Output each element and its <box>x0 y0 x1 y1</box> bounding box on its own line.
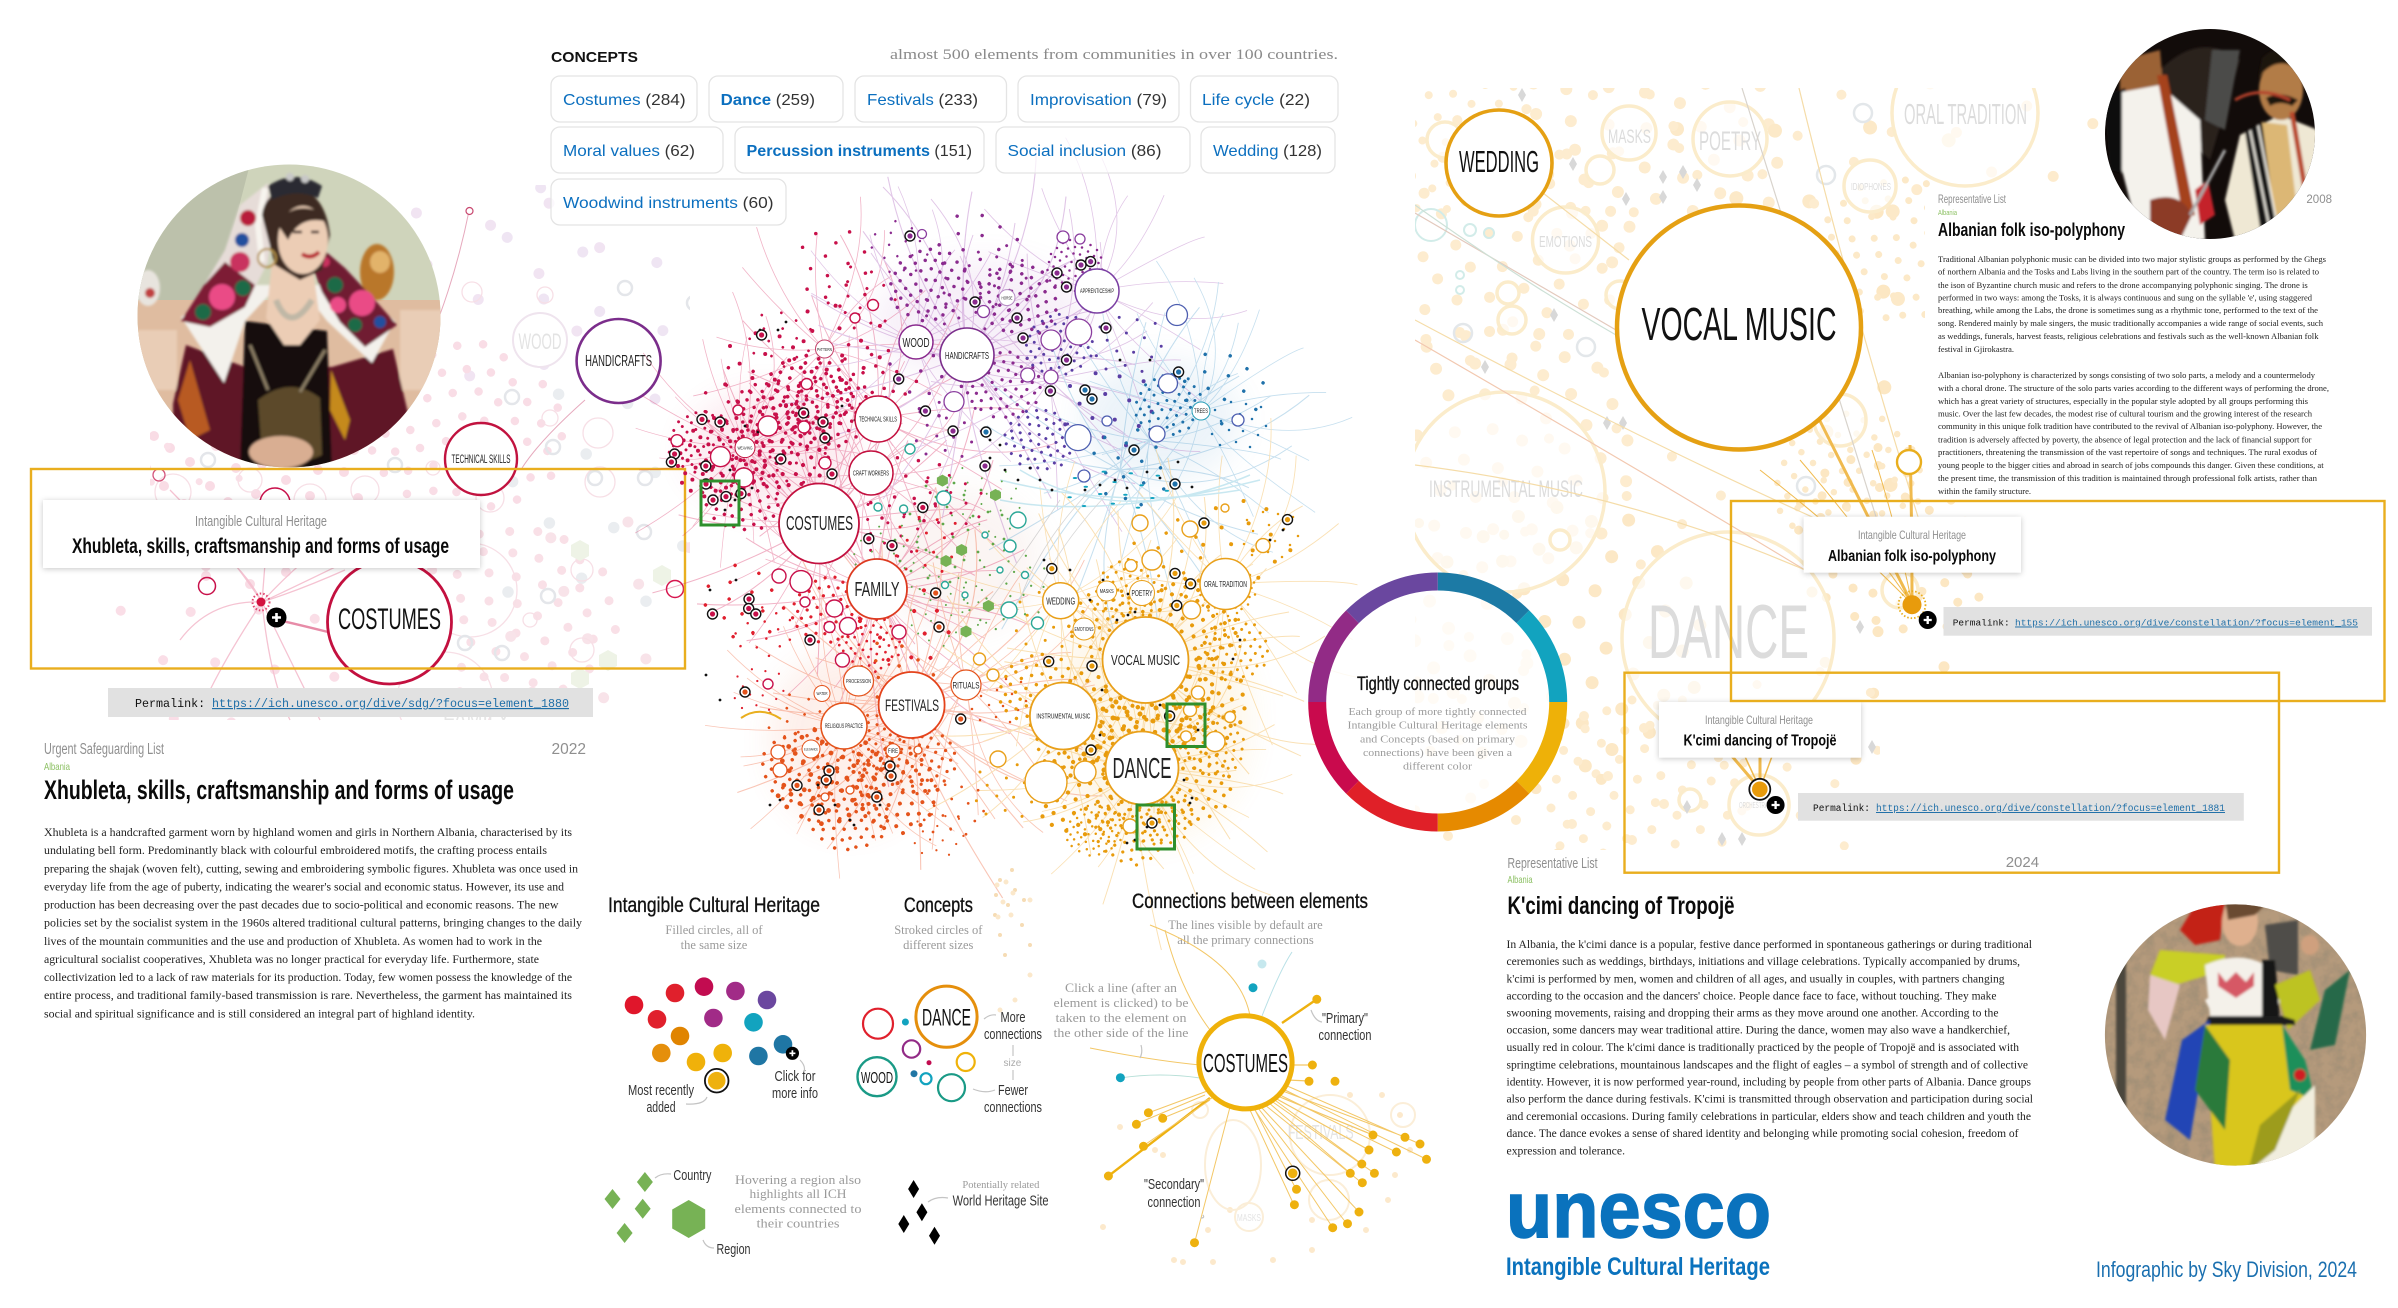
concept: elegance <box>802 740 820 758</box>
year: K'cimi: 2024 <box>2006 854 2039 871</box>
description paragraph: agricultural socialist cooperatives, Xhubleta was no longer practical for everyday life. Furthermore, state <box>44 954 539 966</box>
country: Albania <box>44 761 70 773</box>
concept: weaving: WEAVING <box>738 446 753 451</box>
icon: plus button <box>266 608 286 628</box>
description paragraph: entire process, and traditional family-based transmission is rare. Nevertheless, the garment has maintained its <box>44 990 573 1002</box>
label: fewer connections: Fewer <box>998 1082 1028 1099</box>
node: K'cimi <box>1749 779 1770 800</box>
donut description: and Concepts (based on primary <box>1360 733 1516 745</box>
heading: concepts: CONCEPTS <box>551 49 638 66</box>
concept: emotions: EMOTIONS <box>1074 627 1094 633</box>
text block: K'cimi dancing of Tropojë <box>1506 855 2033 1158</box>
description paragraph: expression and tolerance. <box>1506 1146 1625 1158</box>
concept: craft workers: CRAFT WORKERS <box>853 470 889 478</box>
description paragraph: and ceremonial occasions. During family celebrations in particular, elders show and teach children and youth the <box>1506 1111 2031 1123</box>
description paragraph: collectivization led to a lack of raw materials for its production. Today, few women possess the knowledge of the <box>44 972 572 984</box>
chip: moral values: Moral values (62) <box>563 143 695 160</box>
concept: festivals <box>879 672 945 738</box>
text block: Albanian folk iso-polyphony <box>1938 194 2332 496</box>
card: iso-polyphony tooltip <box>1804 517 2021 573</box>
description paragraphs: music. Over the last few decades, the modest rise of cultural tourism and the growing interest of the research <box>1938 408 2313 418</box>
recently added nodes <box>666 231 1292 828</box>
panel: zoomed costumes constellation background <box>116 185 690 720</box>
description paragraphs: festival in Gjirokastra. <box>1938 344 2014 354</box>
element title: Albanian folk iso-polyphony <box>1938 220 2125 240</box>
chip: woodwind instruments: Woodwind instruments (60) <box>563 195 774 212</box>
concept: wedding <box>1043 583 1079 619</box>
concept: wood circle <box>858 1057 896 1096</box>
focus links: K'cimi <box>1731 758 1772 782</box>
concept: dance: DANCE <box>1112 753 1172 785</box>
concept: instrumental music <box>1030 682 1097 750</box>
concept: instrumental music: INSTRUMENTAL MUSIC <box>1036 714 1090 720</box>
concept: technical skills: TECHNICAL SKILLS <box>859 416 897 424</box>
donut description <box>1348 706 1528 773</box>
concept: pattern: PATTERN <box>817 347 832 352</box>
description paragraphs: community in this unique folk tradition have contributed to the revival of Albanian iso-polyphony. However, the <box>1938 421 2322 431</box>
faded concept circles <box>1405 40 2038 835</box>
dots: green cluster <box>842 451 1063 652</box>
description paragraph: springtime celebrations, mountainous landscapes and the flight of eagles – a symbol of strength and of collective <box>1506 1060 2028 1072</box>
example small nodes <box>902 1018 932 1077</box>
links of the focused element <box>153 208 684 720</box>
icon: plus button <box>1919 611 1937 629</box>
description paragraphs: the ison of Byzantine church music and refers to the drone accompanying polyphonic singing. The drone is <box>1938 280 2308 290</box>
tail of dots under network <box>995 870 1030 955</box>
chip: life cycle: Life cycle (22) <box>1202 92 1310 109</box>
year: 2022 <box>552 741 586 758</box>
label: more connections <box>984 1009 1042 1043</box>
donut: tightly connected groups <box>1317 582 1558 822</box>
connected nodes <box>1108 999 1426 1243</box>
chip: costumes: Costumes (284) <box>563 92 686 109</box>
permalink bar: Xhubleta: https://ich.unesco.org/dive/sdg/?focus=element_1880 <box>212 697 569 711</box>
description: Stroked circles of <box>894 923 983 937</box>
note: hovering a region: Hovering a region also <box>735 1173 861 1187</box>
description paragraphs: the present time, the transmission of this tradition is maintained through professional folk artists, rather than <box>1938 473 2318 483</box>
concept: technical skills <box>445 423 517 495</box>
description paragraph: k'cimi is performed by men, women and children of all ages, and usually in couples, with partners changing <box>1506 974 2005 986</box>
description paragraph: preparing the shajak (woven felt), cutting, sewing and embroidering symbolic figures. Xhubleta was once used in <box>44 864 578 876</box>
label: most recently added: Most recently <box>628 1082 694 1099</box>
concept: wedding large <box>1446 110 1552 216</box>
region hexagon <box>672 1200 705 1238</box>
faded background: MASKS <box>1237 1213 1261 1224</box>
permalink bar: Xhubleta: Permalink: <box>135 697 205 711</box>
faded concept labels: INSTRUMENTAL MUSIC <box>1429 476 1583 503</box>
click for more info icon <box>786 1047 799 1060</box>
concept: vocal music: VOCAL MUSIC <box>1111 652 1180 669</box>
example concept rings <box>863 1009 975 1101</box>
description paragraphs: which has a great variety of structures, especially in the popular style adopted by all groups performing this <box>1938 396 2309 406</box>
concept: water <box>814 686 830 702</box>
description paragraphs: with a choral drone. The structure of the solo parts varies according to the different ways of performing the drone, <box>1938 383 2329 393</box>
description paragraphs: song. Rendered mainly by male singers, the music traditionally accompanies a wide range of social events, such <box>1938 318 2324 328</box>
faded concept labels: DANCE <box>1648 590 1809 675</box>
chart: central constellation network <box>580 88 1451 998</box>
permalink bar: K'cimi: Permalink: <box>1813 803 1870 814</box>
concept: technical skills: TECHNICAL SKILLS <box>452 454 511 466</box>
concept: masks <box>1097 581 1117 601</box>
dots: orange-red cluster <box>750 632 1026 864</box>
label: world heritage site: World Heritage Site <box>953 1192 1049 1210</box>
permalink bar: iso-polyphony <box>1944 607 2372 636</box>
description paragraph: occasion, some dancers may wear traditional attire. During the dance, women may also wave a handkerchief, <box>1506 1024 2010 1036</box>
text: intro fragment: almost 500 elements from communities in over 100 countries. <box>890 47 1338 63</box>
label: region: Region <box>716 1242 750 1258</box>
element title: Xhubleta, skills, craftsmanship and forms of usage <box>44 775 514 805</box>
concept: dance circle <box>916 986 977 1047</box>
concept: apprenticeship <box>1075 269 1119 313</box>
dots: crimson cluster <box>663 226 989 573</box>
black diamonds <box>898 1180 940 1245</box>
label: click for more info <box>772 1068 818 1102</box>
faded concept labels <box>1429 99 2027 810</box>
heading: Connections between elements <box>1132 890 1368 913</box>
concept rings: blue-violet <box>1065 304 1244 482</box>
concept: costumes: COSTUMES <box>786 513 853 535</box>
concept: weaving <box>735 438 755 458</box>
concept: costumes large <box>328 560 452 684</box>
logo wordmark: unesco <box>1506 1165 1771 1254</box>
card: K'cimi tooltip: K'cimi dancing of Tropojë <box>1684 732 1837 750</box>
concept: horse: HORSE <box>1002 296 1012 300</box>
heading: Concepts <box>904 894 973 917</box>
element title: K'cimi dancing of Tropojë <box>1508 892 1735 920</box>
concept: technical skills <box>855 396 901 442</box>
small concept ring <box>1897 450 1921 474</box>
description paragraphs: tradition is adversely affected by poverty, the absence of legal protection and the lack of financial support for <box>1938 434 2312 444</box>
filled circles <box>625 977 792 1071</box>
legend: intangible cultural heritage: the same size <box>681 938 748 952</box>
legend: intangible cultural heritage <box>608 894 820 1116</box>
label: most recently added <box>628 1082 694 1116</box>
permalink bar: iso-polyphony: https://ich.unesco.org/dive/constellation/?focus=element_155 <box>2015 618 2358 628</box>
label: click for more info: Click for <box>774 1068 816 1085</box>
description paragraph: everyday life from the age of puberty, indicating the wearer's social and economic status. However, its use and <box>44 882 564 894</box>
description: The lines visible by default are <box>1168 918 1323 932</box>
year: 2008 <box>2306 194 2332 206</box>
note: click a line: taken to the element on <box>1056 1011 1187 1025</box>
concept: religious practice <box>821 703 867 749</box>
concept: costumes circle: COSTUMES <box>1203 1048 1288 1078</box>
grey world heritage diamonds <box>1481 88 1888 846</box>
description paragraphs: as weddings, funerals, harvest feasts, religious celebrations and festivals such as the well-known Albanian folk <box>1938 331 2319 341</box>
list label: Representative List <box>1508 855 1598 872</box>
concept: handicrafts: HANDICRAFTS <box>945 351 989 362</box>
concept: costumes large: COSTUMES <box>338 603 441 636</box>
label: click for more info: more info <box>772 1085 818 1102</box>
description paragraphs: practitioners, threatening the transmission of the vast repertoire of songs and techniques. The rural exodus of <box>1938 447 2317 457</box>
concept: festivals: FESTIVALS <box>885 696 939 715</box>
photo: K'cimi dancer <box>2100 898 2372 1172</box>
concept: vocal music large: VOCAL MUSIC <box>1642 298 1836 350</box>
card: K'cimi tooltip: Intangible Cultural Heritage <box>1705 713 1813 727</box>
donut description: Intangible Cultural Heritage elements <box>1348 720 1528 732</box>
orange frame: Xhubleta zoom <box>31 469 685 668</box>
chip: wedding: Wedding (128) <box>1213 143 1322 160</box>
donut description: Each group of more tightly connected <box>1348 706 1527 718</box>
description paragraph <box>44 827 582 1020</box>
note: click a line: element is clicked) to be <box>1054 996 1189 1010</box>
panel: concepts filter chips <box>551 49 1338 225</box>
ringed node <box>1286 1166 1300 1180</box>
description paragraph: ceremonies such as weddings, birthdays, initiations and village celebrations. Typically accompanied by drums, <box>1506 956 2020 968</box>
description paragraph: identity. However, it is now performed year-round, including by people from other parts of Albania. Dance groups <box>1506 1076 2032 1088</box>
marker: green square costumes <box>701 481 739 525</box>
permalink bar: iso-polyphony: Permalink: <box>1953 618 2010 628</box>
country: Albania <box>1508 874 1533 886</box>
faded background: FESTIVALS <box>1288 1122 1354 1144</box>
concept: dance <box>1106 732 1178 804</box>
list label: Urgent Safeguarding List <box>44 741 164 758</box>
card: K'cimi tooltip <box>1659 702 1861 758</box>
description paragraph: according to the occasion and the dancers' choice. People dance face to face, without touching. They make <box>1506 990 1996 1002</box>
faded link lines <box>1415 88 1919 570</box>
concept: apprenticeship: APPRENTICESHIP <box>1080 289 1114 295</box>
focus links: iso-polyphony <box>1760 421 1912 604</box>
description paragraphs: breathing, while among the Labs, the drone is sometimes sung as a rhythmic tone, performed to the text of the <box>1938 305 2318 315</box>
faded concept: family: FAMILY <box>443 706 510 733</box>
concept rings: crimson <box>671 300 906 689</box>
legend: connections between elements: all the primary connections <box>1177 933 1314 947</box>
concept rings: purple <box>918 230 1092 412</box>
legend: concepts: different sizes <box>903 938 974 952</box>
description paragraphs: of northern Albania and the Tosks and Labs living in the southern part of the country. The term iso is related to <box>1938 266 2320 276</box>
faded concept labels: EMOTIONS <box>1539 234 1592 251</box>
label: country: Country <box>673 1168 712 1184</box>
description paragraph: also perform the dance during festivals. K'cimi is transmitted through observation and participation during social <box>1506 1094 2033 1106</box>
faint dots behind <box>997 882 1030 1010</box>
dots: purple cluster <box>865 204 1102 456</box>
description paragraph: dance. The dance evokes a sense of shared identity and belonging while promoting social cohesion, freedom of <box>1506 1128 2019 1140</box>
label: secondary connection: connection <box>1148 1194 1200 1211</box>
concept: oral tradition <box>1200 558 1251 610</box>
legend: country and region <box>604 1168 862 1258</box>
card: Xhubleta tooltip: Xhubleta, skills, craftsmanship and forms of usage <box>72 535 449 558</box>
orange frame: K'cimi zoom <box>1624 673 2279 873</box>
region hexagons <box>937 475 1001 638</box>
concept: fire: FIRE <box>888 748 898 755</box>
concept: water: WATER <box>816 691 828 696</box>
label: primary connection: connection <box>1318 1027 1372 1044</box>
legend: world heritage site <box>898 1180 1049 1245</box>
node: iso-polyphony <box>1898 591 1926 618</box>
concept nodes with labels <box>735 269 1251 804</box>
concept: wood circle: WOOD <box>861 1070 893 1087</box>
link lines <box>580 88 1451 998</box>
label: most recently added: added <box>646 1099 676 1116</box>
note: click a line: the other side of the line <box>1054 1026 1189 1040</box>
legend: connections between elements <box>1054 890 1426 1262</box>
concept: handicrafts: HANDICRAFTS <box>585 353 652 370</box>
card: iso-polyphony tooltip: Intangible Cultural Heritage <box>1858 528 1966 542</box>
chip: festivals: Festivals (233) <box>867 92 978 109</box>
concept: trees <box>1192 402 1210 420</box>
faded concept: wood <box>513 313 567 367</box>
note: click a line <box>1054 981 1189 1040</box>
note: hovering a region: their countries <box>756 1216 840 1230</box>
concept: horse <box>999 290 1015 306</box>
most recently added node <box>705 1069 728 1092</box>
description paragraph: policies set by the socialist system in the 1960s altered traditional cultural patterns, bringing changes to the daily <box>44 918 582 930</box>
description: Filled circles, all of <box>665 923 763 937</box>
description paragraph: lives of the mountain communities and the use and production of Xhubleta. As women had to work in the <box>44 936 542 948</box>
heading: Intangible Cultural Heritage <box>608 894 820 917</box>
permalink bar: Xhubleta <box>108 688 593 717</box>
text block: Xhubleta description <box>44 741 586 1020</box>
concept: rituals <box>951 670 981 700</box>
concept: trees: TREES <box>1194 409 1208 415</box>
concept: dance circle: DANCE <box>922 1004 971 1032</box>
concept: emotions <box>1073 618 1095 640</box>
concept: poetry: POETRY <box>1132 589 1153 598</box>
concept: vocal music <box>1102 617 1188 703</box>
concept: family: FAMILY <box>854 579 900 601</box>
label: fewer connections: connections <box>984 1099 1042 1116</box>
note: hovering a region <box>734 1173 862 1230</box>
description paragraphs: Albanian iso-polyphony is characterized by songs consisting of two solo parts, a melody and a countermelody <box>1938 370 2316 380</box>
concept: masks: MASKS <box>1100 589 1114 595</box>
concept: family <box>847 559 907 619</box>
concept: craft workers <box>849 451 893 495</box>
description paragraph: In Albania, the k'cimi dance is a popular, festive dance performed in spontaneous gatherings or during traditional <box>1506 939 2032 951</box>
concept: wedding: WEDDING <box>1046 596 1075 608</box>
faded concept labels: ORCHESTRAS <box>1739 801 1771 810</box>
concept: costumes <box>779 484 859 564</box>
dots: orange cluster <box>976 495 1298 875</box>
dots: teal cluster <box>1070 472 1167 508</box>
dots: blue cluster <box>1088 343 1273 515</box>
faded concept labels: IDIOPHONES <box>1851 182 1891 193</box>
description paragraphs: within the family structure. <box>1938 486 2031 496</box>
faded concept labels: MASKS <box>1608 127 1651 148</box>
marker: green square K'cimi <box>1137 805 1174 849</box>
chip: dance: Dance (259) <box>721 92 815 109</box>
faded concept labels: POETRY <box>1699 126 1761 156</box>
concept: elegance: ELEGANCE <box>804 746 818 752</box>
country: Albania <box>1938 208 1958 217</box>
label: potentially related: Potentially related <box>962 1180 1039 1191</box>
teal nodes <box>1116 960 1266 1082</box>
note: hovering a region: highlights all ICH <box>750 1187 846 1201</box>
panel: zoomed vocal music constellation background <box>1415 88 2098 850</box>
logo subtitle: Intangible Cultural Heritage <box>1506 1253 1770 1281</box>
faded background <box>1103 1090 1415 1262</box>
permalink bar: K'cimi: https://ich.unesco.org/dive/constellation/?focus=element_1881 <box>1876 803 2225 814</box>
label: secondary connection <box>1144 1176 1204 1211</box>
label: fewer connections <box>984 1082 1042 1116</box>
legend: concepts <box>858 882 1042 1116</box>
orange frame: iso-polyphony zoom <box>1731 501 2384 701</box>
concept rings: orange-red <box>771 745 922 801</box>
concept: rituals: RITUALS <box>952 680 980 690</box>
marker: green square folk iso-polyphony <box>1167 704 1205 746</box>
description paragraphs <box>1938 254 2329 496</box>
description paragraph: production has been decreasing over the past decades due to socio-political and economic reasons. The new <box>44 900 559 912</box>
colour tint under network <box>685 260 1250 840</box>
label: size: size <box>1004 1058 1022 1069</box>
note: click a line: Click a line (after an <box>1065 981 1178 995</box>
label: primary connection: "Primary" <box>1322 1010 1368 1027</box>
concept: procession <box>844 666 874 696</box>
concept: pattern <box>816 340 834 358</box>
concept: handicrafts <box>577 319 661 403</box>
description paragraph: usually red in colour. The k'cimi dance is traditionally practiced by the people of Tropojë and is associated with <box>1506 1042 2019 1054</box>
description paragraph: social and spiritual significance and is still considered an integral part of highland identity. <box>44 1008 475 1020</box>
concept: handicrafts <box>940 328 994 382</box>
card: iso-polyphony tooltip: Albanian folk iso-polyphony <box>1828 548 1996 565</box>
concept rings: orange <box>974 504 1270 833</box>
selected element node <box>252 594 270 610</box>
donut heading: Tightly connected groups <box>1357 674 1519 695</box>
card: Xhubleta tooltip <box>43 500 480 568</box>
country diamonds <box>604 1172 653 1243</box>
logo: UNESCO <box>1506 1165 1771 1281</box>
label: primary connection <box>1318 1010 1372 1044</box>
label: more connections: connections <box>984 1026 1042 1043</box>
concept: religious practice: RELIGIOUS PRACTICE <box>825 724 863 730</box>
card: Xhubleta tooltip: Intangible Cultural Heritage <box>195 513 327 530</box>
chip: social inclusion: Social inclusion (86) <box>1008 143 1162 160</box>
chip: percussion instruments: Percussion instruments (151) <box>746 143 972 160</box>
description paragraphs: young people to the bigger cities and abroad in search of jobs compounds this danger. Given these conditions, at <box>1938 460 2324 470</box>
description paragraph: undulating bell form. Predominantly black with colourful embroidered motifs, the crafting process entails <box>44 845 548 857</box>
description paragraphs: performed in two ways: among the Tosks, it is always continuous and sung on the syllable 'e', using staggered <box>1938 292 2313 302</box>
faded concept labels: ORAL TRADITION <box>1904 99 2027 131</box>
photo: folk musicians <box>2100 25 2320 245</box>
label: more connections: More <box>1000 1009 1026 1026</box>
link lines <box>1090 925 1426 1243</box>
description paragraph <box>1506 939 2033 1158</box>
concept: poetry <box>1130 580 1154 606</box>
list label: Representative List <box>1938 194 2007 206</box>
faded concept: wood: WOOD <box>518 329 562 354</box>
label: secondary connection: "Secondary" <box>1144 1176 1204 1193</box>
concept: fire <box>886 744 900 758</box>
concept: procession: PROCESSION <box>846 679 871 685</box>
concept: wood: WOOD <box>902 335 930 350</box>
concept: wedding large: WEDDING <box>1459 144 1539 179</box>
permalink bar: K'cimi <box>1798 793 2244 821</box>
concept rings: teal <box>874 444 1044 629</box>
dots: red cluster <box>696 517 961 710</box>
concept: vocal music large <box>1617 206 1861 450</box>
concept: wood <box>899 325 933 359</box>
dots: violet cluster <box>995 310 1161 485</box>
icon: plus button <box>1767 796 1785 814</box>
chip: improvisation: Improvisation (79) <box>1030 92 1167 109</box>
note: hovering a region: elements connected to <box>734 1202 862 1216</box>
photo: woman in Xhubleta costume <box>136 164 445 468</box>
description paragraph: swooning movements, raising and dropping their arms as they move around one another. According to the <box>1506 1008 1998 1020</box>
description paragraph: Xhubleta is a handcrafted garment worn by highland women and girls in Northern Albania, characterised by its <box>44 827 573 839</box>
concept: oral tradition: ORAL TRADITION <box>1204 580 1247 589</box>
concept: costumes circle <box>1199 1016 1292 1109</box>
donut description: connections) have been given a <box>1363 747 1512 759</box>
description paragraphs: Traditional Albanian polyphonic music can be divided into two major stylistic groups as performed by the Ghegs <box>1938 254 2327 264</box>
dots: black unlabeled <box>706 290 1283 843</box>
donut description: different color <box>1403 761 1472 773</box>
